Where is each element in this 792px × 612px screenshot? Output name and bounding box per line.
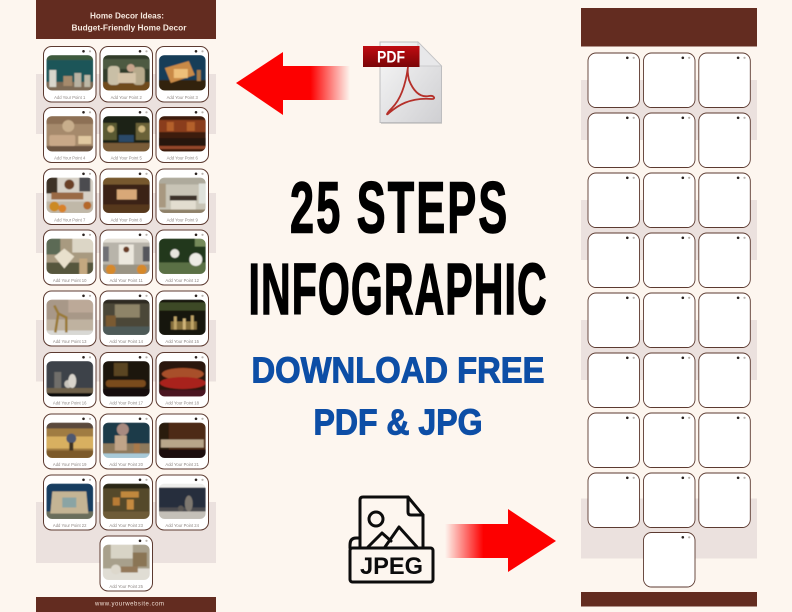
card: point 17 (100, 352, 152, 408)
title: 25 steps infographic: INFOGRAPHIC (248, 250, 547, 330)
footer: website: www.yourwebsite.com (94, 602, 164, 608)
card: point 13: Add Your Point 13 (53, 339, 87, 344)
card: point 1 (44, 46, 96, 102)
photo: autumn porch (46, 178, 93, 214)
photo: rustic entry (103, 300, 150, 336)
photo: golden deer figure (46, 300, 93, 336)
card: point 5: Add Your Point 5 (111, 156, 142, 160)
card: point 1: Add Your Point 1 (54, 95, 86, 100)
header: preview title (36, 0, 216, 39)
card: point 18: Add Your Point 18 (165, 400, 200, 406)
card: point 21: Add Your Point 21 (165, 462, 200, 467)
title: 25 steps infographic (248, 167, 547, 330)
card: point 17: Add Your Point 17 (109, 400, 144, 406)
photo: amber candle room (159, 116, 206, 152)
arrow: pointing left to preview (236, 52, 350, 115)
card: point 7 (44, 169, 96, 224)
photo: warm living room (46, 116, 93, 152)
arrow: pointing right to template (445, 509, 556, 572)
card: point 15 (156, 291, 208, 346)
card: point 18 (156, 352, 208, 408)
photo: candles under branches (159, 300, 206, 336)
subtitle: download free (252, 350, 544, 442)
footer: website (36, 597, 216, 612)
header: preview title: Home Decor Ideas: (90, 12, 164, 20)
photo: white front door with pumpkins (103, 238, 150, 274)
card: point 9 (156, 169, 208, 224)
header: blank template (581, 8, 757, 46)
card: point 19 (44, 414, 96, 469)
card: point 22 (44, 475, 96, 530)
photo: red diya lights (159, 361, 206, 397)
photo: hanging lanterns (103, 484, 150, 520)
photo: dim candle table (103, 361, 150, 397)
card: point 23 (100, 475, 152, 530)
photo: glowing lights and globe (46, 422, 93, 458)
panel: blank infographic template (581, 8, 757, 606)
photo: vases on a dark shelf (46, 361, 93, 397)
card: point 10 (44, 230, 96, 285)
card: point 14 (100, 291, 152, 346)
photo: lit cabin at night (159, 55, 206, 91)
card: point 8: Add Your Point 8 (111, 218, 142, 222)
card: point 15: Add Your Point 15 (165, 339, 200, 344)
card: point 7: Add Your Point 7 (54, 218, 86, 222)
card: point 22: Add Your Point 22 (53, 523, 87, 528)
subtitle: download free: DOWNLOAD FREE (252, 350, 544, 390)
card: point 10: Add Your Point 10 (53, 278, 87, 283)
panel: filled infographic preview (36, 0, 216, 612)
card: point 24 (156, 475, 208, 530)
icon: PDF file (363, 42, 442, 124)
photo: cream sofa setting (103, 55, 150, 91)
icon: JPEG file (350, 497, 433, 582)
photo: white baubles in fir tree (159, 238, 206, 274)
photo: flowers in a glass vase (103, 422, 150, 458)
card: point 16: Add Your Point 16 (53, 400, 87, 406)
card: point 3: Add Your Point 3 (167, 95, 198, 100)
card: point 12: Add Your Point 12 (165, 278, 200, 283)
photo: rustic lit bar (103, 178, 150, 214)
card: point 5 (100, 108, 152, 162)
card: point 20: Add Your Point 20 (109, 462, 144, 467)
photo: navy sofa with vases (159, 484, 206, 520)
card: point 8 (100, 169, 152, 224)
card: point 9: Add Your Point 9 (167, 218, 198, 222)
header: preview title: Budget-Friendly Home Decor (72, 24, 186, 32)
card: point 13 (44, 291, 96, 346)
card: point 3 (156, 46, 208, 102)
photo: outdoor canopy at dusk (46, 484, 93, 520)
photo: soft book and mug scene (103, 544, 150, 580)
card: point 11: Add Your Point 11 (110, 278, 143, 283)
card: point 20 (100, 414, 152, 469)
card: point 4: Add Your Point 4 (54, 156, 86, 160)
card: point 24: Add Your Point 24 (165, 523, 200, 528)
card: point 14: Add Your Point 14 (109, 339, 144, 344)
card: point 16 (44, 352, 96, 408)
title: 25 steps infographic: 25 STEPS (290, 167, 507, 248)
card: point 19: Add Your Point 19 (53, 462, 87, 467)
icon: PDF file: PDF (377, 48, 405, 66)
card: point 2 (100, 46, 152, 102)
card: point 2: Add Your Point 2 (111, 95, 142, 100)
photo: grand dark hall (103, 116, 150, 152)
photo: dark wood table with flowers (159, 422, 206, 458)
card: point 4 (44, 108, 96, 162)
icon: JPEG file: JPEG (360, 553, 423, 580)
card: point 12 (156, 230, 208, 285)
card: point 6 (156, 108, 208, 162)
subtitle: download free: PDF & JPG (314, 402, 482, 442)
photo: bright bedroom (159, 178, 206, 214)
card: point 11 (100, 230, 152, 285)
card: point 25: Add Your Point 25 (109, 584, 144, 589)
footer: blank template (581, 592, 757, 606)
photo: woven heart ornament (46, 238, 93, 274)
card: point 25 (100, 536, 152, 591)
blank card grid (588, 53, 750, 587)
card: point 21 (156, 414, 208, 469)
photo: teal wall with gifts (46, 55, 93, 91)
card: point 6: Add Your Point 6 (167, 156, 198, 160)
card: point 23: Add Your Point 23 (109, 523, 144, 528)
